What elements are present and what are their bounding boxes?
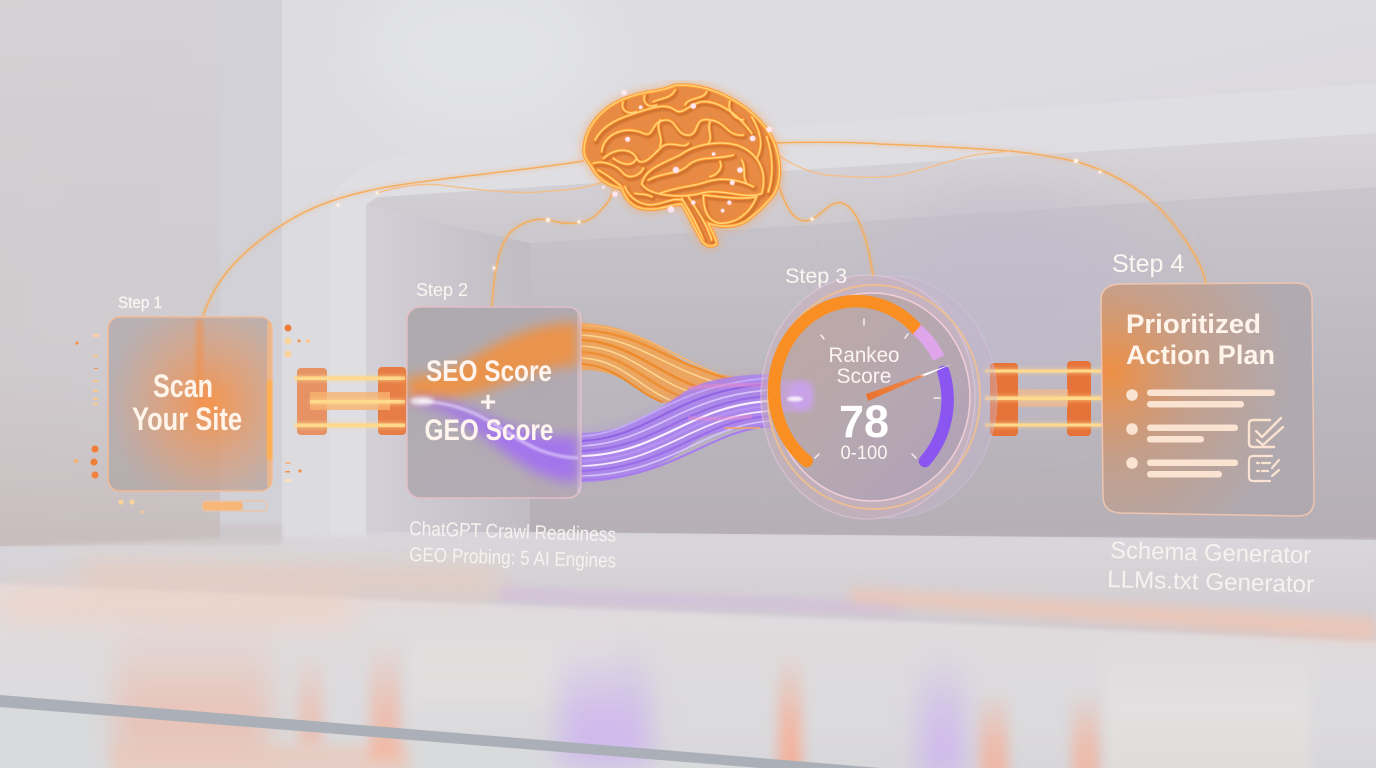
gauge needle — [866, 364, 952, 401]
step 3 label: Step 3 — [785, 264, 847, 288]
card heading: Your Site — [132, 401, 242, 437]
step 2 details: GEO Probing: 5 AI Engines — [409, 544, 616, 572]
progress bar — [202, 501, 267, 511]
gauge text: Score — [836, 364, 892, 388]
action plan heading: Prioritized — [1126, 309, 1261, 339]
step 2 details: ChatGPT Crawl Readiness — [409, 518, 616, 546]
card heading: Scan — [153, 368, 213, 404]
action plan heading: Action Plan — [1126, 340, 1275, 370]
step 4 details: Schema Generator — [1110, 537, 1311, 569]
connector: step 1 to step 2 — [295, 367, 406, 435]
gauge text: 78 — [839, 396, 889, 447]
brain — [584, 85, 779, 246]
front counter edge — [0, 695, 880, 768]
floor glows and reflections — [0, 565, 1376, 768]
connector: gauge to step 4 — [985, 361, 1103, 436]
panel: step 4 action plan — [1101, 283, 1314, 516]
step 4 details — [1107, 537, 1314, 598]
icon: edit list — [1249, 456, 1279, 481]
card scores text: GEO Score — [424, 414, 554, 447]
gauge text: Rankeo — [828, 343, 900, 367]
gauge arcs — [774, 301, 948, 461]
step 1 label: Step 1 — [118, 293, 162, 312]
scan indicator dots — [74, 324, 310, 514]
icon: checklist — [1249, 418, 1283, 447]
gauge ticks — [793, 319, 940, 458]
step 2 details — [409, 518, 616, 572]
panel: step 2 scores — [407, 307, 581, 498]
card scores text: + — [480, 386, 496, 417]
step 4 details: LLMs.txt Generator — [1107, 566, 1314, 598]
gauge: rankeo score — [761, 275, 997, 519]
gauge text: 0-100 — [840, 443, 888, 464]
step 2 label: Step 2 — [416, 280, 468, 300]
data streams from step 2 to gauge — [582, 323, 780, 482]
wire connectors from brain to steps — [203, 142, 1206, 316]
card scores text: SEO Score — [426, 355, 552, 388]
action list — [1126, 389, 1275, 478]
step 4 label: Step 4 — [1112, 250, 1184, 278]
panel: step 1 scan your site — [108, 317, 272, 491]
